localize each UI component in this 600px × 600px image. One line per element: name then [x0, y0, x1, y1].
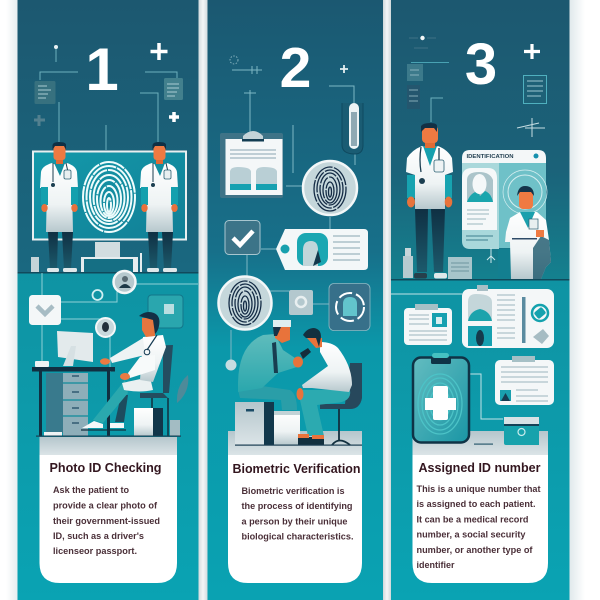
torso	[302, 342, 352, 392]
desk monitor	[57, 331, 93, 362]
faint cross	[34, 115, 45, 126]
thigh	[238, 385, 297, 410]
plant	[177, 375, 188, 403]
check tile	[225, 220, 260, 254]
body text: their government-issued	[53, 516, 160, 526]
concentric rings	[418, 374, 462, 434]
legs	[415, 209, 428, 272]
coat	[406, 146, 453, 209]
document icon right	[164, 78, 183, 100]
back and arm	[238, 334, 300, 392]
stethoscope	[420, 147, 439, 172]
hand	[293, 356, 303, 368]
clipboard with charts	[220, 131, 283, 198]
neck	[425, 139, 435, 148]
panel 1 upper background	[18, 0, 198, 273]
body text: identifier	[416, 560, 455, 570]
small arrow	[487, 248, 495, 263]
cross mark	[517, 118, 545, 137]
stethoscope	[147, 335, 157, 350]
plus icons	[150, 43, 179, 122]
monitor stand	[95, 242, 120, 257]
phone with cross	[413, 353, 469, 442]
doctor right	[140, 142, 178, 272]
shoes	[414, 273, 427, 278]
body text: Ask the patient to	[53, 485, 130, 495]
bottle	[403, 248, 413, 278]
barcode tube	[342, 103, 363, 154]
body text: provide a clear photo of	[53, 500, 157, 510]
ID tag	[276, 229, 368, 270]
face	[519, 190, 533, 209]
panel 3 upper background	[391, 0, 570, 280]
step number 2: 2	[280, 36, 311, 100]
step number 3: 3	[465, 32, 497, 97]
shoes	[82, 421, 124, 428]
medical cross	[425, 386, 456, 420]
ID card swatch	[504, 417, 539, 445]
badge	[529, 219, 538, 229]
heading: Photo ID Checking	[50, 460, 162, 475]
connector lines	[231, 66, 355, 362]
hair	[421, 123, 437, 132]
grey tile	[289, 290, 313, 315]
near leg	[93, 380, 128, 423]
panel 1 lower background	[18, 273, 198, 600]
hand	[536, 230, 544, 237]
lower connectors	[42, 273, 198, 372]
thigh	[122, 377, 153, 392]
connector lines lower	[391, 294, 503, 419]
text card	[412, 431, 548, 583]
upper arm	[110, 338, 145, 363]
monitor with fingerprint	[31, 152, 186, 273]
panel 3: assigned ID number	[391, 0, 570, 600]
fingerprint lines	[314, 167, 346, 211]
seated clinician	[81, 312, 188, 436]
cap	[273, 320, 291, 327]
body text	[416, 484, 541, 570]
plus icon	[524, 44, 540, 59]
hair	[303, 328, 321, 347]
node dot	[409, 36, 436, 48]
panel 1: photo ID checking	[18, 0, 198, 600]
text card	[228, 431, 362, 583]
step number 1: 1	[85, 36, 119, 103]
status dot	[534, 154, 538, 158]
outlined document	[524, 76, 546, 104]
body text: number, a social security	[416, 530, 526, 540]
hands	[100, 358, 110, 365]
heading: Biometric Verification	[232, 461, 361, 476]
far leg	[115, 395, 128, 422]
panel 2: biometric verification	[208, 0, 383, 600]
body text: number, or another type of	[416, 545, 533, 555]
clipboard line	[512, 238, 537, 240]
monitor base	[81, 257, 138, 272]
sleeves	[407, 175, 452, 198]
ID card	[462, 150, 547, 278]
scrub neck	[520, 212, 535, 228]
avatar circle top	[114, 271, 136, 293]
small node dot	[54, 45, 58, 49]
body text	[53, 485, 160, 556]
body text: a person by their unique	[242, 516, 348, 526]
device	[300, 348, 311, 359]
fingerprint lines lower	[229, 281, 261, 325]
connector lines	[40, 48, 177, 150]
hair	[273, 327, 281, 336]
photo slot	[462, 168, 497, 230]
head and hair	[142, 318, 155, 337]
hands	[407, 196, 415, 208]
floor line	[18, 272, 198, 274]
examiner	[238, 320, 311, 410]
body text: licenseor passport.	[53, 546, 137, 556]
body text: Biometric verification is	[242, 486, 345, 496]
face	[307, 338, 322, 348]
body text: biological characteristics.	[242, 532, 354, 542]
fingerprint	[83, 162, 135, 232]
card title: IDENTIFICATION	[466, 154, 514, 160]
body text: This is a unique number that	[416, 484, 541, 494]
box	[134, 408, 163, 436]
heading: Assigned ID number	[418, 460, 540, 475]
plus icon	[340, 65, 348, 73]
small teal block	[498, 249, 511, 278]
large doctor	[406, 123, 453, 278]
shaded side	[533, 236, 551, 279]
ring icon	[92, 290, 102, 300]
clipboard document	[404, 304, 452, 345]
floor baseline	[36, 436, 181, 437]
avatar circle lower	[96, 318, 115, 337]
fingerprint circle lower	[218, 276, 272, 330]
coat	[505, 212, 551, 279]
halo rings	[508, 175, 542, 209]
floor line	[391, 279, 570, 280]
body text: is assigned to each patient.	[416, 499, 536, 509]
body text: It can be a medical record	[416, 514, 528, 524]
dotted circle	[230, 56, 238, 64]
hair	[517, 186, 534, 196]
body text: the process of identifying	[242, 501, 352, 511]
hand	[296, 388, 304, 400]
record card	[462, 285, 554, 348]
legs	[300, 390, 350, 436]
face	[275, 327, 290, 343]
lower arm	[128, 355, 155, 378]
fingerprint circle	[303, 161, 357, 215]
teal tile	[148, 295, 183, 328]
scrub neck	[423, 146, 437, 166]
boxes	[235, 402, 300, 445]
panel 2 background	[208, 0, 383, 600]
small doctor	[505, 186, 551, 279]
tie	[272, 342, 278, 373]
panel 3 lower background	[391, 280, 570, 600]
small node	[226, 360, 236, 370]
connector lines	[431, 98, 443, 122]
face scan tile	[329, 284, 370, 330]
check tile	[29, 295, 61, 325]
desk and drawers	[32, 331, 115, 436]
doctor left	[40, 142, 78, 272]
face	[422, 126, 438, 143]
report card	[495, 356, 554, 405]
chair	[140, 345, 173, 398]
torso	[140, 335, 166, 382]
patient	[296, 328, 362, 445]
paper sheet	[448, 257, 472, 279]
text card	[40, 437, 177, 583]
body text	[242, 486, 354, 542]
body text: ID, such as a driver's	[53, 531, 144, 541]
floor baseline	[235, 444, 362, 446]
shoes	[298, 437, 324, 445]
small stacked documents	[407, 62, 449, 109]
document icon left	[34, 81, 56, 104]
chair	[320, 363, 362, 409]
